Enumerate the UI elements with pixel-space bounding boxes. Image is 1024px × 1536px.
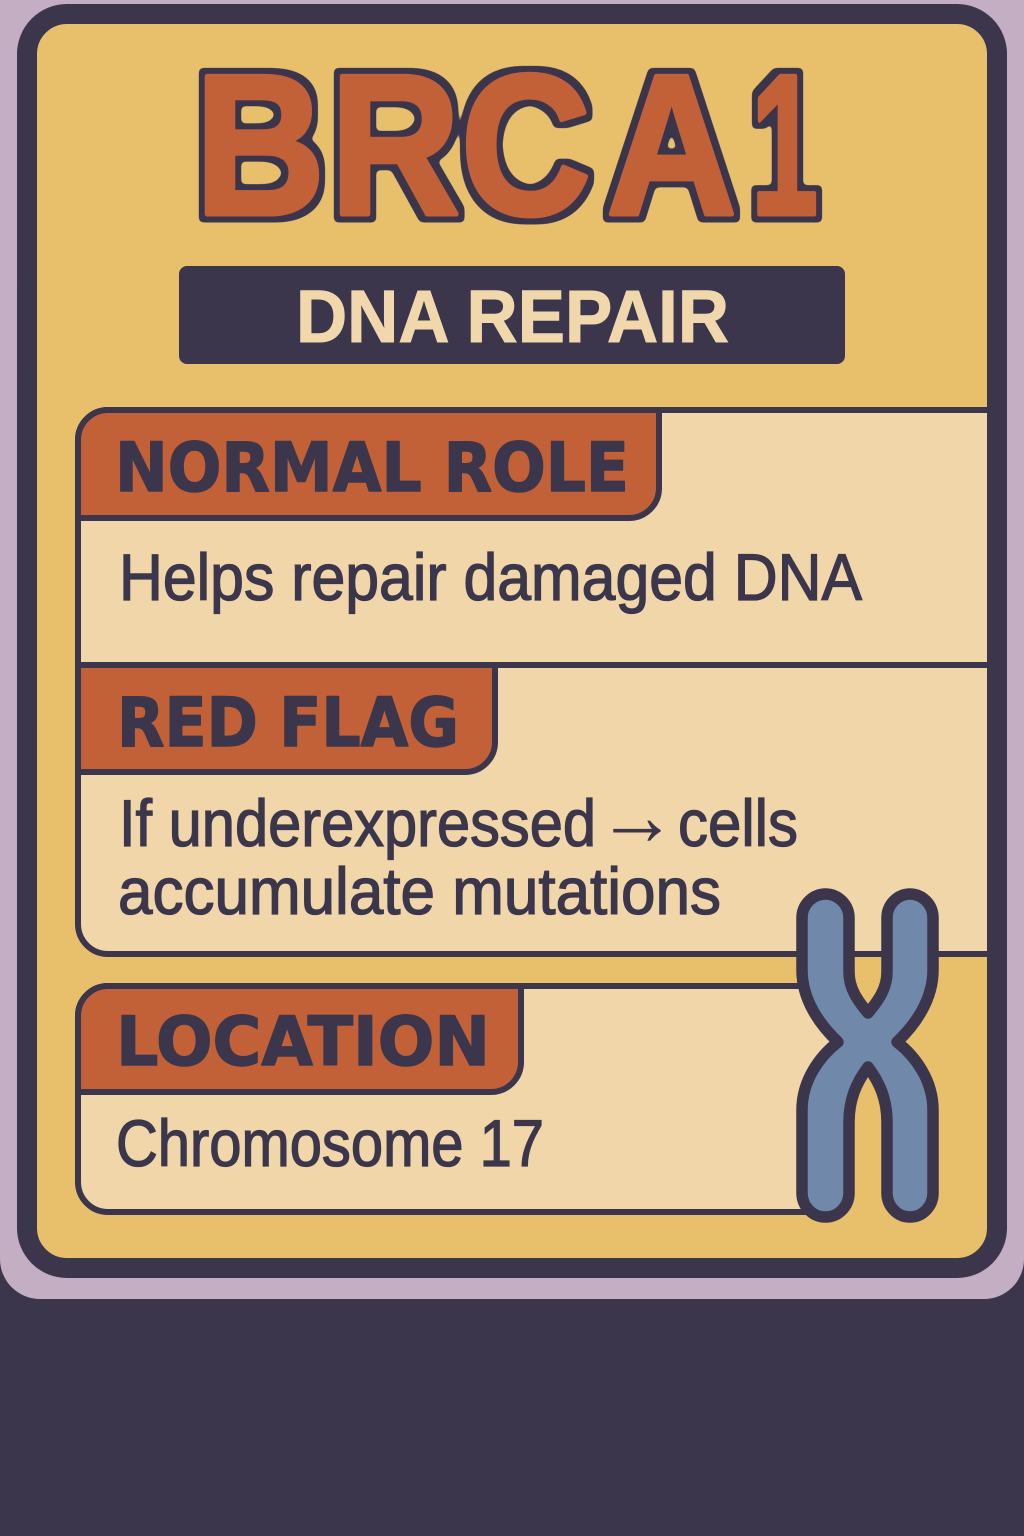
text: normal role: Helps repair damaged DNA [119,540,862,614]
panel: normal role and red flag [78,410,987,954]
text: location: Chromosome 17 [116,1106,544,1180]
panel: location [78,986,830,1212]
text: red flag: → [597,768,677,864]
subtitle banner: DNA REPAIR [296,275,729,358]
tab: red flag: RED FLAG [117,684,459,763]
tab: red flag [78,665,495,772]
text: red flag: If underexpressed [119,786,596,860]
tab: normal role: NORMAL ROLE [115,429,629,508]
card frame [27,14,997,1268]
text: red flag [118,768,798,928]
title: BRCA1: BRCA [195,34,737,257]
title: BRCA1: 1 [751,33,818,256]
tab: location [78,986,521,1092]
icon: chromosome [802,894,933,1217]
tab: normal role [78,410,659,518]
tab: location: LOCATION [116,1003,490,1082]
text: red flag: cells [678,786,798,860]
text: red flag: accumulate mutations [118,854,721,928]
subtitle banner [179,266,845,364]
